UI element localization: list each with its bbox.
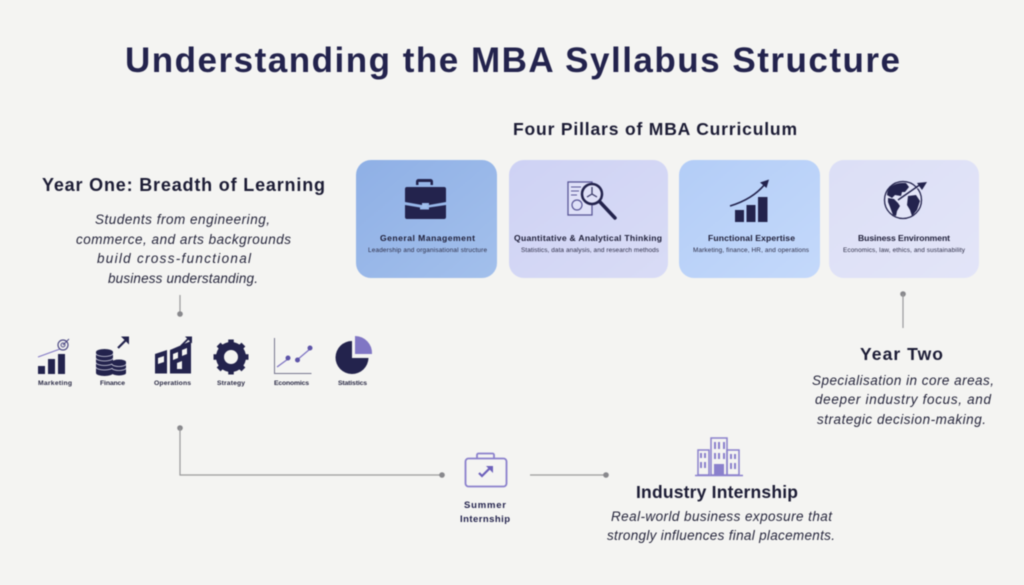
heading: four pillars: Four Pillars of MBA Curriculum — [513, 119, 797, 139]
card title: General Management — [380, 233, 475, 243]
year two description: deeper industry focus, and — [815, 392, 991, 407]
year one description: build cross-functional — [97, 251, 252, 266]
title: Understanding the MBA Syllabus Structure — [125, 41, 900, 80]
subject: operations — [154, 336, 192, 387]
text block: year one — [42, 175, 325, 286]
icon: briefcase — [405, 179, 446, 219]
panel: business environment — [829, 160, 979, 278]
card description: Economics, law, ethics, and sustainability — [843, 247, 966, 254]
card title: Business Environment — [858, 233, 950, 243]
label: Marketing — [38, 380, 72, 387]
icon: building — [695, 438, 743, 476]
connector: year one to subjects — [177, 295, 183, 317]
connector: business environment to year two — [900, 291, 906, 328]
panel: industry internship — [607, 438, 835, 543]
panel: summer internship: Internship — [460, 514, 510, 525]
heading: industry internship: Industry Internship — [636, 482, 798, 502]
icon: globe with arrow — [884, 182, 927, 218]
icon: gear — [214, 340, 248, 374]
label: Summer — [464, 500, 506, 511]
connector: year one to summer internship — [177, 425, 445, 478]
year two description — [812, 373, 994, 427]
icon: coins with arrow — [96, 336, 129, 376]
heading: year two: Year Two — [860, 344, 943, 364]
year two description: strategic decision-making. — [817, 412, 986, 427]
year one description: business understanding. — [108, 271, 258, 286]
label: Finance — [100, 380, 125, 387]
arrow: internship connector — [530, 472, 609, 478]
subject: statistics — [336, 336, 372, 387]
subject: economics — [274, 338, 312, 387]
internship description: Real-world business exposure that — [611, 509, 833, 524]
label: Economics — [274, 380, 309, 387]
card description: Statistics, data analysis, and research methods — [521, 247, 659, 254]
card title: Functional Expertise — [708, 233, 795, 243]
year one description: commerce, and arts backgrounds — [76, 232, 291, 247]
year two description: Specialisation in core areas, — [812, 373, 994, 388]
subject: marketing — [38, 339, 72, 387]
icon: factory blocks with arrow — [155, 336, 192, 374]
panel: quantitative thinking — [509, 160, 668, 278]
icon: pie chart — [336, 336, 372, 374]
panel: general management — [356, 160, 497, 278]
icon: rising bar chart — [730, 180, 769, 222]
card title: Quantitative & Analytical Thinking — [514, 233, 662, 243]
internship description — [607, 509, 835, 543]
card description: Leadership and organisational structure — [368, 247, 487, 254]
icon: line chart — [274, 338, 312, 374]
year one description — [76, 212, 291, 286]
panel: summer internship — [460, 454, 510, 525]
heading: year one: Year One: Breadth of Learning — [42, 175, 325, 195]
year one description: Students from engineering, — [95, 212, 270, 227]
icon: purple briefcase — [466, 454, 506, 486]
label: Strategy — [217, 380, 245, 387]
icon: marketing — [38, 339, 69, 374]
subject: strategy — [214, 340, 248, 387]
text block: year two — [812, 344, 994, 427]
label: Operations — [154, 380, 191, 387]
card description: Marketing, finance, HR, and operations — [693, 247, 809, 254]
icon: document with magnifier — [568, 182, 615, 218]
subject: finance — [96, 336, 129, 387]
label: Statistics — [338, 380, 367, 387]
internship description: strongly influences final placements. — [607, 528, 835, 543]
panel: functional expertise — [679, 160, 820, 278]
